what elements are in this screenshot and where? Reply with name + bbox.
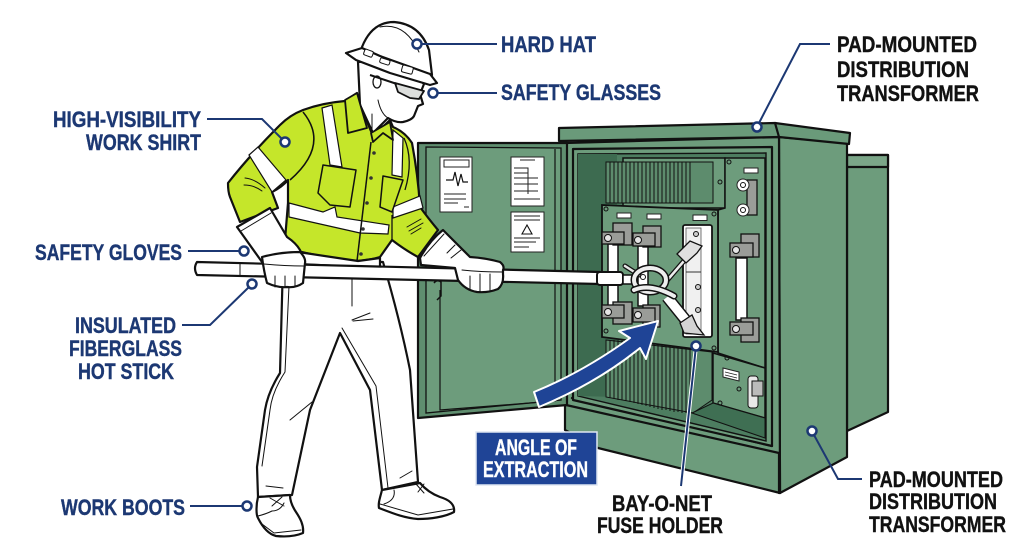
right boot [379,483,454,519]
upper radiator fins [606,162,713,203]
callout: pad-mounted transformer top: PAD-MOUNTED [837,32,977,57]
left glove fingers [262,252,305,287]
callout: insulated fiberglass hot stick [69,280,256,384]
upper back panel [623,158,725,208]
collar and placket [244,93,423,261]
right glove [420,230,504,292]
left glove cuff [237,208,305,263]
warning sticker two [511,157,544,206]
hook clamp [625,266,674,296]
cabinet front frame [565,137,780,493]
cabinet lid [559,123,850,144]
warning sticker three [511,212,544,252]
callout: safety gloves: SAFETY GLOVES [35,240,182,265]
worker hands [262,230,504,292]
callout: pad-mounted transformer top [752,32,979,132]
board labels and screws [604,160,758,360]
callout: insulated fiberglass hot stick: FIBERGLASS [69,336,182,361]
callout: pad-mounted transformer bottom [808,426,1006,537]
callout: safety glasses: SAFETY GLASSES [501,80,661,105]
angle of extraction label box: EXTRACTION [483,457,588,482]
callout: safety glasses [428,80,661,105]
warning sticker one [440,157,472,212]
callout: hard hat [412,32,596,57]
high-visibility work shirt [228,93,438,261]
cabinet base plinth [566,398,779,493]
callout: pad-mounted transformer bottom: DISTRIBUTION [869,489,997,514]
legs [257,262,418,497]
hard hat [346,22,437,85]
cutout fuse two [633,226,661,327]
cabinet interior [573,147,772,446]
neck and face [358,60,424,133]
callout: bay-o-net fuse holder: FUSE HOLDER [597,513,723,538]
cutout fuse one [602,223,632,324]
callout: high-visibility work shirt: WORK SHIRT [86,130,201,155]
cabinet side face [779,137,847,493]
bushings [737,179,757,216]
lower radiator fins [606,340,712,413]
reflective stripes [249,105,423,234]
right side panel [718,158,765,368]
fuse mounting board [602,205,718,352]
insulated fiberglass hot stick [195,262,674,296]
belt area [298,252,380,268]
callout: pad-mounted transformer top: TRANSFORMER [837,81,979,106]
rear cooling box [847,155,888,431]
callout: high-visibility work shirt: HIGH-VISIBILITY [53,107,201,132]
callout: work boots: WORK BOOTS [61,495,185,520]
door hinge handle [434,281,441,300]
cutout fuse three [730,234,759,342]
safety glasses [370,75,424,99]
open cabinet door [418,143,567,418]
callout: insulated fiberglass hot stick: INSULATED [75,313,176,338]
callout: bay-o-net fuse holder [597,342,723,538]
bay-o-net fuse holder [664,225,712,337]
callout: insulated fiberglass hot stick: HOT STICK [78,359,174,384]
callout: high-visibility work shirt [53,107,290,155]
callout: bay-o-net fuse holder: BAY-O-NET [612,491,712,516]
angle of extraction label box [476,432,597,485]
callout: hard hat: HARD HAT [501,32,596,57]
callout: pad-mounted transformer top: DISTRIBUTION [837,57,969,82]
angle of extraction arrow [534,321,658,407]
worker [228,22,454,536]
lower right panel [692,353,765,438]
shirt pockets [318,165,403,212]
angle of extraction label box: ANGLE OF [495,435,577,460]
left boot [256,495,303,536]
